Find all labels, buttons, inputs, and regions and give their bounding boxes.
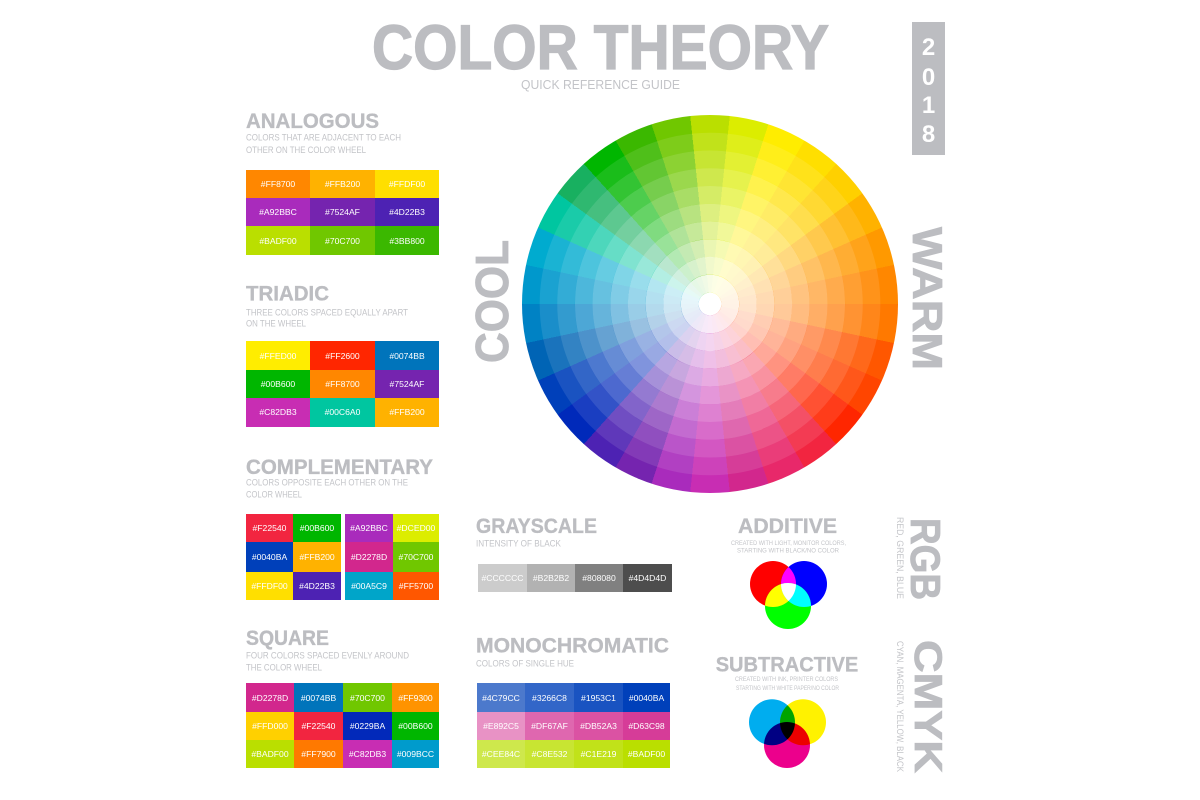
subtractive description [735, 676, 839, 692]
grayscale heading: GRAYSCALE [476, 515, 597, 538]
grayscale swatches: #808080 [582, 573, 616, 583]
monochromatic swatches: #3266C8 [532, 693, 567, 703]
additive description: CREATED WITH LIGHT, MONITOR COLORS, [731, 540, 846, 547]
monochromatic swatches: #0040BA [629, 693, 664, 703]
monochromatic swatches: #C1E219 [581, 749, 617, 759]
complementary swatches left [246, 514, 341, 600]
monochromatic swatches [477, 683, 670, 768]
complementary swatches right: #DCED00 [397, 523, 436, 533]
complementary swatches left: #FFB200 [299, 552, 335, 562]
analogous swatches [246, 170, 439, 255]
complementary swatches right: #00A5C9 [351, 581, 387, 591]
triadic swatches: #C82DB3 [259, 407, 297, 417]
year badge: 2 [922, 34, 935, 61]
triadic swatches: #00C6A0 [325, 407, 361, 417]
triadic swatches: #FFED00 [260, 351, 297, 361]
triadic swatches: #00B600 [261, 379, 295, 389]
triadic swatches: #FF2600 [325, 351, 360, 361]
warm label: WARM [904, 227, 951, 370]
analogous swatches: #70C700 [325, 236, 360, 246]
color wheel [522, 114, 898, 492]
square swatches: #0229BA [350, 721, 385, 731]
year badge: 1 [922, 92, 935, 119]
monochromatic heading: MONOCHROMATIC [476, 635, 669, 658]
panel: additive [731, 515, 846, 629]
panel: triadic [246, 283, 439, 427]
complementary description [246, 478, 408, 499]
triadic description [246, 308, 408, 329]
RGB label: RGB [902, 518, 949, 600]
monochromatic swatches: #CEE84C [482, 749, 520, 759]
year badge [912, 22, 945, 155]
complementary swatches left: #F22540 [253, 523, 287, 533]
grayscale swatches: #4D4D4D [629, 573, 666, 583]
additive description [731, 540, 846, 555]
square swatches: #009BCC [397, 749, 434, 759]
square description [246, 650, 409, 673]
triadic swatches: #0074BB [389, 351, 425, 361]
complementary swatches left: #4D22B3 [299, 581, 335, 591]
analogous swatches: #BADF00 [259, 236, 297, 246]
grayscale description: INTENSITY OF BLACK [476, 539, 561, 549]
monochromatic swatches: #E892C5 [483, 721, 519, 731]
cool label: COOL [466, 240, 518, 363]
panel: subtractive [716, 654, 858, 768]
complementary swatches right: #70C700 [399, 552, 434, 562]
triadic swatches [246, 341, 439, 427]
additive RGB venn diagram [750, 561, 827, 629]
square swatches: #0074BB [301, 693, 336, 703]
subtractive heading: SUBTRACTIVE [716, 654, 858, 677]
title: COLOR THEORY [372, 13, 829, 83]
triadic swatches: #FF8700 [325, 379, 360, 389]
square swatches: #C82DB3 [349, 749, 386, 759]
analogous description [246, 132, 401, 155]
analogous swatches: #FFDF00 [389, 179, 425, 189]
analogous description: OTHER ON THE COLOR WHEEL [246, 145, 366, 155]
monochromatic swatches: #BADF00 [628, 749, 665, 759]
monochromatic swatches: #DB52A3 [580, 721, 617, 731]
complementary swatches right [345, 514, 439, 600]
year badge: 8 [922, 121, 935, 148]
square swatches: #D2278D [252, 693, 288, 703]
triadic description: ON THE WHEEL [246, 319, 306, 329]
monochromatic swatches: #C8E532 [532, 749, 568, 759]
complementary description: COLOR WHEEL [246, 489, 302, 499]
complementary swatches left: #0040BA [252, 552, 287, 562]
square swatches: #BADF00 [251, 749, 289, 759]
panel: square [246, 627, 439, 768]
panel: monochromatic [476, 635, 670, 768]
subtractive description: STARTING WITH WHITE PAPER/NO COLOR [736, 685, 839, 692]
analogous description: COLORS THAT ARE ADJACENT TO EACH [246, 132, 401, 142]
grayscale swatches [478, 564, 672, 592]
complementary swatches left: #00B600 [300, 523, 334, 533]
additive heading: ADDITIVE [738, 515, 837, 538]
square swatches: #F22540 [302, 721, 336, 731]
analogous swatches: #3BB800 [389, 236, 425, 246]
monochromatic swatches: #D63C98 [628, 721, 665, 731]
square heading: SQUARE [246, 627, 329, 650]
grayscale swatches: #B2B2B2 [533, 573, 569, 583]
year badge: 0 [922, 64, 935, 91]
analogous swatches: #7524AF [325, 207, 360, 217]
square swatches: #FFD000 [252, 721, 288, 731]
panel: grayscale [476, 515, 672, 592]
square swatches: #00B600 [398, 721, 433, 731]
triadic swatches: #7524AF [390, 379, 424, 389]
CMYK description: CYAN, MAGENTA, YELLOW, BLACK [895, 641, 905, 772]
complementary heading: COMPLEMENTARY [246, 456, 433, 479]
analogous swatches: #4D22B3 [389, 207, 425, 217]
analogous swatches: #FFB200 [325, 179, 360, 189]
complementary description: COLORS OPPOSITE EACH OTHER ON THE [246, 478, 408, 488]
triadic description: THREE COLORS SPACED EQUALLY APART [246, 308, 408, 318]
complementary swatches right: #D2278D [351, 552, 387, 562]
subtractive description: CREATED WITH INK, PRINTER COLORS [735, 676, 839, 683]
monochromatic swatches: #4C79CC [482, 693, 520, 703]
subtractive CMY venn diagram [749, 699, 826, 768]
monochromatic swatches: #1953C1 [581, 693, 616, 703]
RGB description: RED, GREEN, BLUE [895, 517, 905, 599]
triadic swatches: #FFB200 [389, 407, 425, 417]
CMYK label: CMYK [906, 640, 949, 773]
square swatches: #70C700 [350, 693, 385, 703]
square description: FOUR COLORS SPACED EVENLY AROUND [246, 650, 409, 660]
analogous heading: ANALOGOUS [246, 110, 379, 133]
additive description: STARTING WITH BLACK/NO COLOR [737, 548, 839, 555]
subtitle: QUICK REFERENCE GUIDE [521, 77, 680, 92]
panel: complementary [246, 456, 439, 600]
square swatches [246, 683, 439, 768]
triadic heading: TRIADIC [246, 283, 329, 306]
complementary swatches right: #A92BBC [350, 523, 388, 533]
square description: THE COLOR WHEEL [246, 663, 322, 673]
square swatches: #FF7900 [301, 749, 336, 759]
complementary swatches left: #FFDF00 [251, 581, 288, 591]
panel: analogous [246, 110, 439, 255]
monochromatic swatches: #DF67AF [531, 721, 568, 731]
monochromatic description: COLORS OF SINGLE HUE [476, 659, 574, 669]
complementary swatches right: #FF5700 [399, 581, 433, 591]
analogous swatches: #A92BBC [259, 207, 297, 217]
analogous swatches: #FF8700 [261, 179, 295, 189]
square swatches: #FF9300 [398, 693, 433, 703]
grayscale swatches: #CCCCCC [481, 573, 524, 583]
